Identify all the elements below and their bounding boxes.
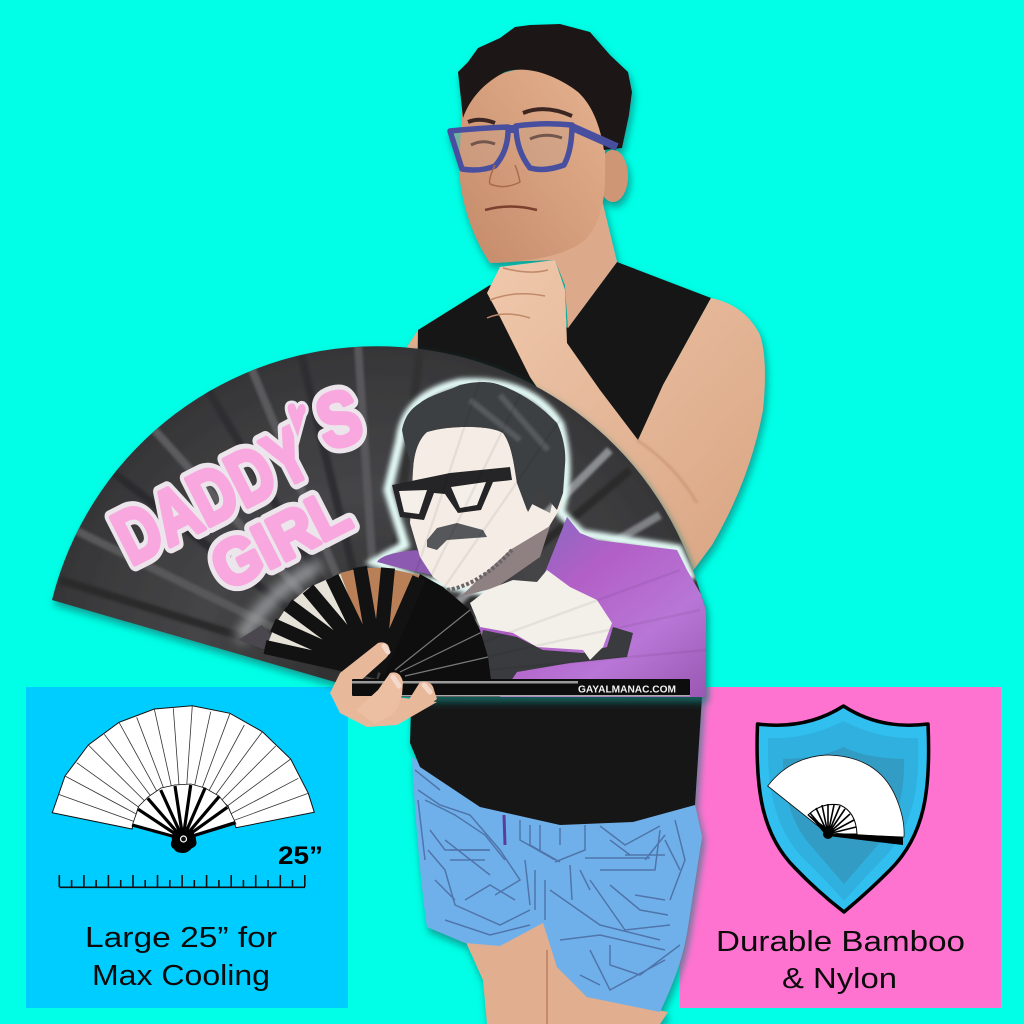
portrait stubble	[447, 550, 512, 590]
hub opening white	[266, 572, 378, 672]
eyebrows	[468, 109, 572, 123]
title outline: GIRL	[200, 474, 361, 603]
handle text: GAYALMANAC.COM	[578, 684, 676, 696]
caption: size: Max Cooling	[92, 960, 270, 992]
panel: size	[26, 687, 348, 1008]
nails	[384, 646, 430, 692]
fan hub	[265, 567, 491, 680]
shield fan	[768, 755, 904, 845]
portrait glow	[375, 383, 690, 600]
size label: 25”	[278, 842, 323, 870]
nose	[490, 165, 520, 187]
title outline: S	[307, 373, 371, 466]
neck	[498, 200, 617, 328]
caption: durable	[716, 926, 965, 995]
fan	[52, 346, 706, 697]
title fill: GIRL	[200, 474, 361, 603]
portrait moustache	[427, 523, 487, 550]
arm	[487, 260, 765, 572]
glasses	[450, 124, 617, 170]
panel: durable	[680, 687, 1001, 1008]
hub glow	[240, 565, 320, 640]
caption: durable: Durable Bamboo	[716, 926, 965, 958]
palm and first finger	[330, 642, 437, 727]
arm crease	[637, 440, 697, 503]
fan handle	[352, 679, 690, 696]
ruler	[59, 875, 305, 887]
hair	[458, 24, 632, 150]
portrait hair highlight	[470, 395, 548, 450]
fist detail	[487, 268, 548, 318]
hand	[330, 642, 690, 727]
portrait glasses	[392, 467, 512, 520]
portrait neck shade	[460, 526, 550, 597]
hub right black	[378, 574, 491, 680]
pleat shading	[414, 380, 706, 664]
title fill: DADDY	[100, 411, 324, 581]
person	[405, 24, 765, 1024]
second finger	[356, 672, 403, 724]
hub opening brown	[340, 568, 430, 672]
fan sticks	[265, 567, 419, 672]
shorts	[412, 757, 702, 1012]
ear	[598, 150, 628, 202]
caption: size: Large 25” for	[85, 922, 277, 954]
icon: large fan	[52, 706, 314, 853]
jacket dark lower	[470, 627, 633, 697]
icon: shield	[757, 706, 929, 912]
fan artwork	[60, 345, 706, 697]
legs	[465, 920, 668, 1024]
hub side patch	[238, 625, 271, 650]
mouth	[485, 206, 537, 210]
face	[459, 68, 605, 263]
eyes	[471, 135, 562, 145]
title heart apostrophe	[286, 402, 307, 442]
caption: size	[85, 922, 277, 992]
jacket left shoulder	[377, 550, 432, 575]
shirt	[410, 262, 711, 825]
portrait hair	[402, 382, 565, 512]
neck and face	[410, 427, 562, 587]
jacket	[470, 517, 706, 697]
left arm sliver	[405, 330, 420, 350]
fan fabric	[52, 346, 706, 697]
title: daddy's girl	[104, 384, 367, 592]
title fill: S	[307, 373, 371, 466]
third finger	[392, 682, 437, 722]
fabric rays	[60, 345, 680, 680]
shirt bib	[470, 570, 612, 660]
stick highlights	[395, 610, 488, 676]
title outline: DADDY	[100, 411, 324, 581]
caption: durable: & Nylon	[782, 963, 897, 995]
